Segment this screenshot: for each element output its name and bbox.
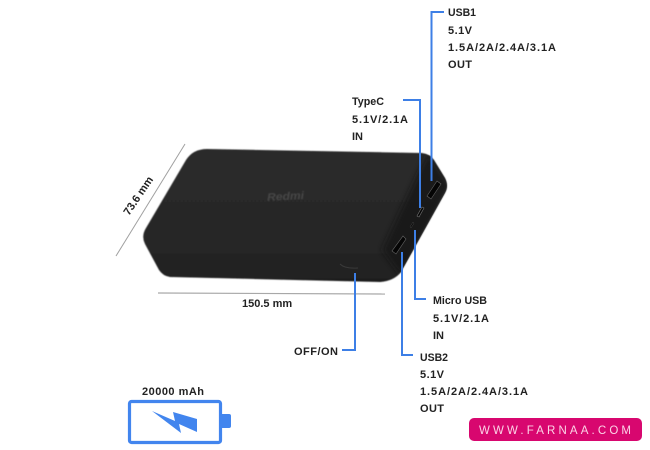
dimension line: depth bbox=[116, 144, 185, 256]
dimension label: 73.6 mm: 73.6 mm bbox=[122, 174, 156, 218]
Redmi logo: Redmi bbox=[267, 190, 305, 204]
callout text: USB2: USB2 bbox=[420, 352, 448, 364]
callout text: Micro USB: IN bbox=[433, 330, 444, 342]
callout text: TypeC bbox=[352, 96, 408, 143]
battery terminal bbox=[222, 414, 231, 428]
callout text: USB1: OUT bbox=[448, 59, 472, 71]
device body bbox=[143, 149, 447, 282]
power bank bbox=[143, 149, 450, 282]
dimension label: 150.5 mm: 150.5 mm bbox=[242, 298, 292, 310]
callout text: USB2 bbox=[420, 352, 528, 415]
callout text: USB1 bbox=[448, 7, 556, 71]
lightning bolt bbox=[152, 411, 197, 433]
callout text: USB2: 5.1V bbox=[420, 369, 445, 381]
callout text: USB1: 1.5A/2A/2.4A/3.1A bbox=[448, 42, 556, 54]
capacity label: 20000 mAh bbox=[142, 386, 204, 398]
callout text: Micro USB: Micro USB bbox=[433, 295, 487, 307]
port: TypeC bbox=[417, 207, 424, 217]
callout line: TypeC bbox=[403, 100, 420, 208]
callout text: Micro USB: 5.1V/2.1A bbox=[433, 313, 489, 325]
badge text: WWW.FARNAA.COM bbox=[479, 425, 631, 437]
badge background bbox=[469, 418, 642, 441]
callout text: USB2: 1.5A/2A/2.4A/3.1A bbox=[420, 386, 528, 398]
callout text: TypeC: TypeC bbox=[352, 96, 384, 108]
callout line: OFF/ON bbox=[342, 273, 355, 350]
callout text: USB2: OUT bbox=[420, 403, 444, 415]
power button bbox=[340, 264, 358, 268]
callout text: USB1: USB1 bbox=[448, 7, 476, 19]
dimension line: width bbox=[158, 293, 385, 294]
callout text: TypeC: IN bbox=[352, 131, 363, 143]
callout text: OFF/ON: OFF/ON bbox=[294, 346, 338, 358]
website badge bbox=[469, 418, 642, 441]
port: Micro USB bbox=[410, 222, 414, 228]
callout text: TypeC: 5.1V/2.1A bbox=[352, 114, 408, 126]
end face shading bbox=[382, 152, 450, 276]
callout line: Micro USB bbox=[415, 230, 426, 299]
icon: battery bbox=[130, 402, 231, 442]
battery outline bbox=[130, 402, 220, 442]
callout line: USB1 bbox=[432, 12, 444, 181]
port: USB1 bbox=[427, 181, 441, 199]
callout text: Micro USB bbox=[433, 295, 489, 342]
callout text: USB1: 5.1V bbox=[448, 25, 473, 37]
callout line: USB2 bbox=[402, 252, 413, 355]
port: USB2 bbox=[392, 236, 406, 254]
